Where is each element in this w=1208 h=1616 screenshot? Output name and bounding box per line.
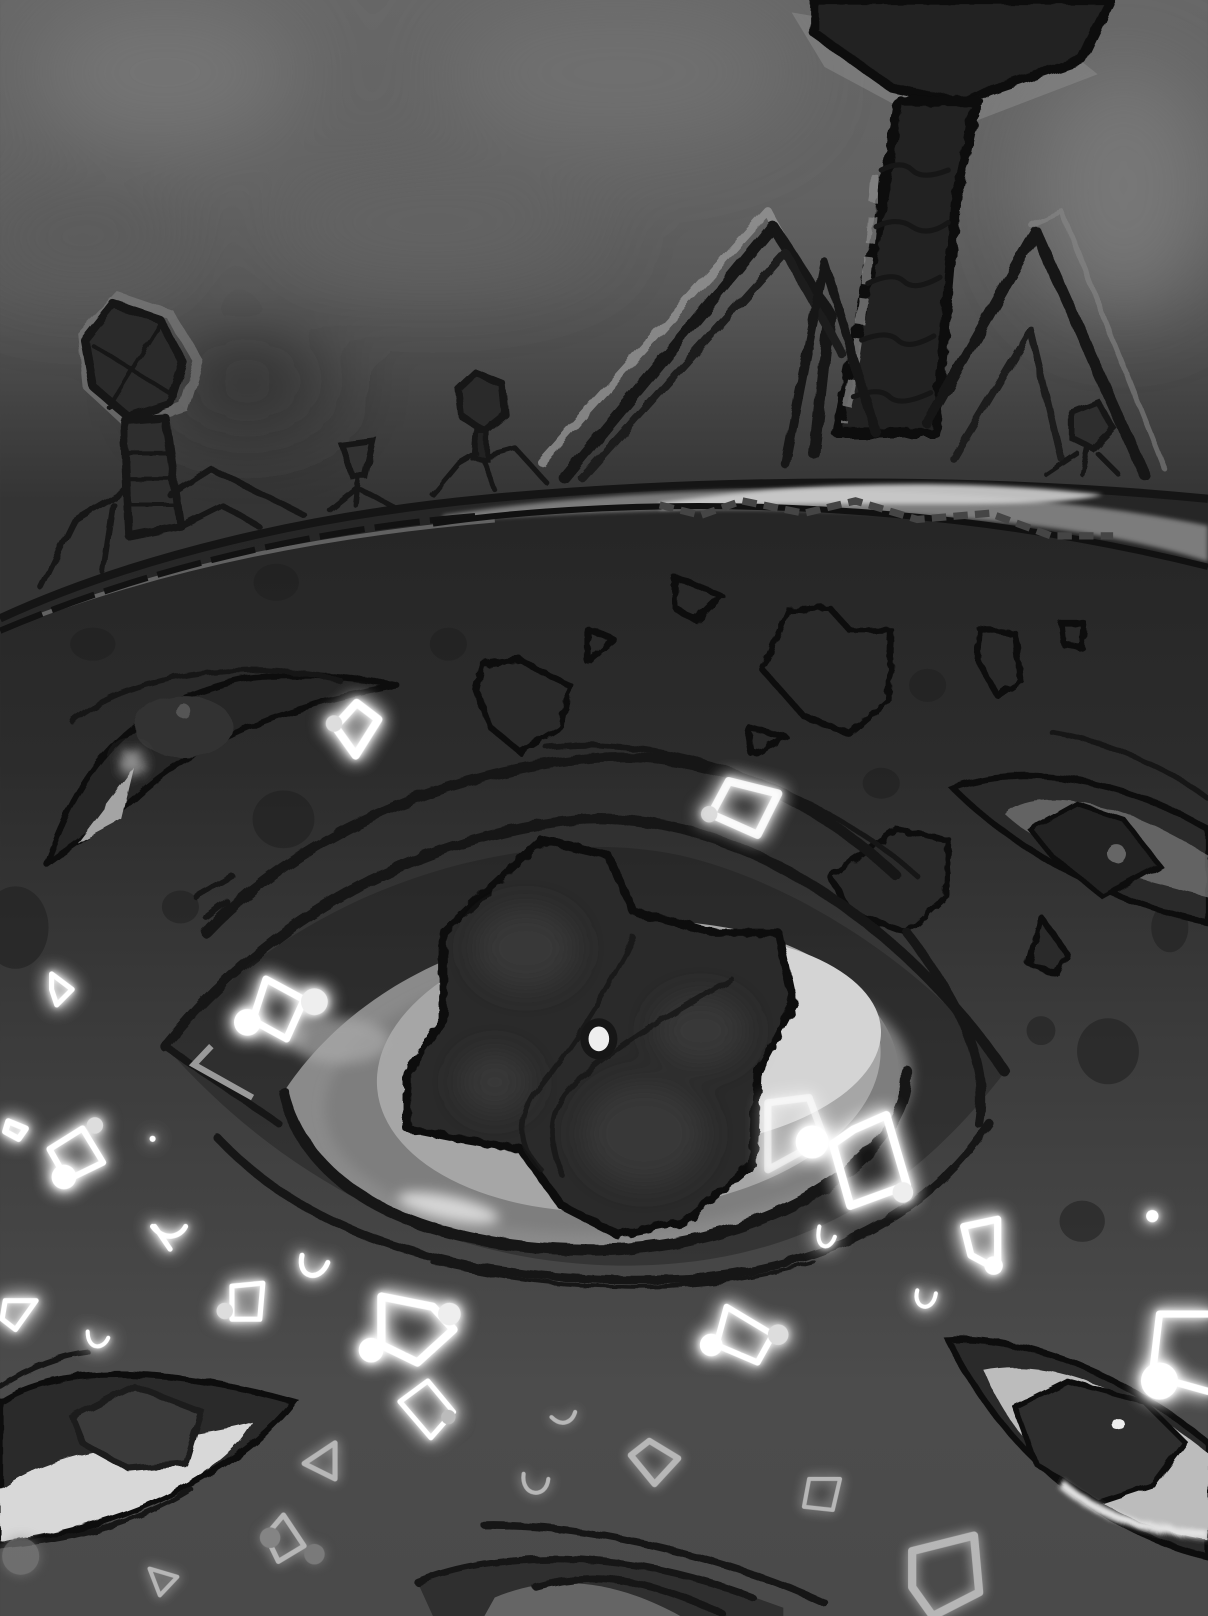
protein pore — [580, 1018, 617, 1059]
fragment top — [326, 703, 378, 755]
dark proteins upper area — [476, 577, 1084, 974]
phage head — [792, 12, 1098, 122]
bottom right eye — [948, 1339, 1208, 1556]
right eye — [953, 732, 1208, 922]
central protein — [407, 840, 794, 1235]
big central eye — [165, 745, 1005, 1287]
background spots — [0, 564, 1188, 1242]
phage legs — [541, 211, 1165, 478]
phage: small ones — [330, 373, 1118, 510]
bottom centre eye — [417, 1525, 825, 1616]
dim fragments lower — [2, 1412, 979, 1616]
bottom left eye — [0, 1352, 294, 1546]
phage: left — [41, 297, 304, 587]
membrane rim — [0, 483, 1208, 618]
upper left eye — [46, 670, 397, 864]
phage tail — [837, 101, 977, 433]
phage: giant top right — [541, 0, 1165, 478]
eyelid strokes — [165, 745, 1005, 1287]
cell body surface — [0, 481, 1208, 1616]
glowing fragments — [2, 703, 1208, 1438]
